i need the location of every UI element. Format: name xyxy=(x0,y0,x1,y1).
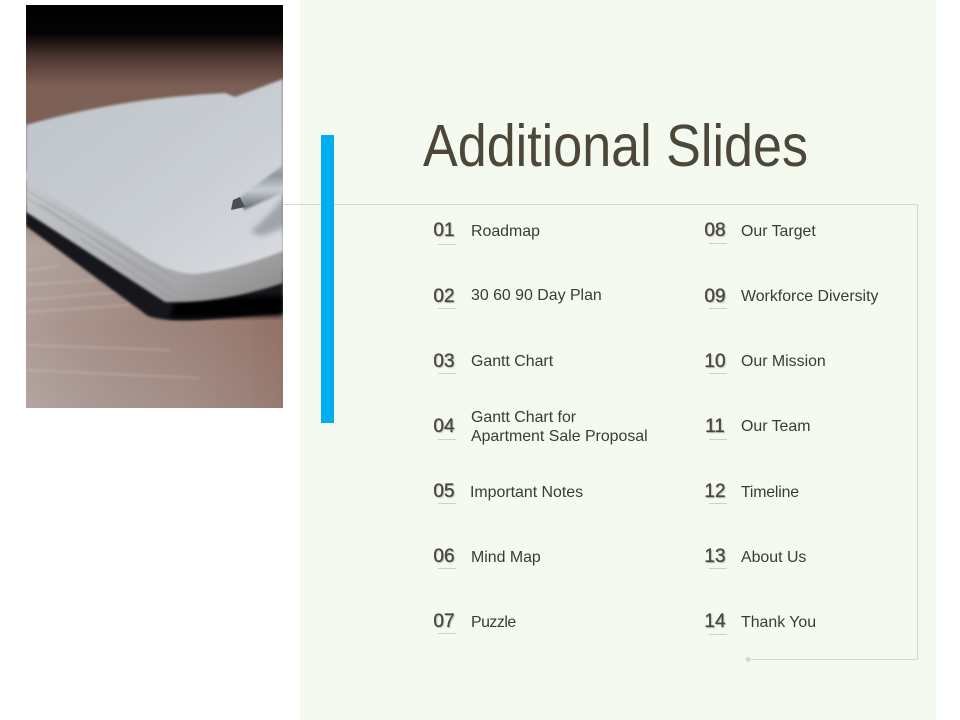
item 09: 09 xyxy=(704,286,726,307)
item 03: Gantt Chart xyxy=(471,353,553,370)
item 10: 10 xyxy=(704,351,726,372)
item 04: Apartment Sale Proposal xyxy=(471,428,648,445)
item 05: Important Notes xyxy=(470,484,583,501)
item 11: Our Team xyxy=(741,418,810,435)
item 02: 02 xyxy=(433,286,455,307)
item 01: Roadmap xyxy=(471,223,540,240)
item 02: 30 60 90 Day Plan xyxy=(471,287,602,304)
list: left column xyxy=(433,220,648,634)
item 12: 12 xyxy=(704,481,726,502)
item 07 xyxy=(433,611,516,634)
item 09: Workforce Diversity xyxy=(741,288,878,305)
item 03: 03 xyxy=(433,351,455,372)
item 04: Gantt Chart for xyxy=(471,409,576,426)
item 11 xyxy=(705,416,810,440)
item 06 xyxy=(433,546,541,569)
item 14: Thank You xyxy=(741,614,816,631)
content frame line xyxy=(283,204,918,662)
item 04: 04 xyxy=(433,416,455,437)
item 03 xyxy=(433,351,554,374)
item 09 xyxy=(704,286,878,309)
item 01 xyxy=(433,220,540,245)
item 12 xyxy=(704,481,799,504)
item 11: 11 xyxy=(705,416,725,437)
item 13: About Us xyxy=(741,549,806,566)
accent bar xyxy=(321,135,334,423)
item 06: 06 xyxy=(433,546,455,567)
item 13: 13 xyxy=(704,546,726,567)
item 12: Timeline xyxy=(741,484,799,501)
item 10: Our Mission xyxy=(741,353,826,370)
item 01: 01 xyxy=(433,220,455,241)
item 02 xyxy=(433,286,602,309)
item 08 xyxy=(704,220,816,244)
item 10 xyxy=(704,351,826,374)
item 05: 05 xyxy=(433,481,455,502)
item 08: Our Target xyxy=(741,223,816,240)
item 14 xyxy=(704,611,816,635)
item 08: 08 xyxy=(704,220,726,241)
panel: pale green background xyxy=(300,0,936,720)
photo: notebook and pen xyxy=(26,5,283,408)
list: right column xyxy=(704,220,878,635)
item 07: Puzzle xyxy=(471,614,516,631)
item 13 xyxy=(704,546,806,569)
item 07: 07 xyxy=(433,611,455,632)
item 05 xyxy=(433,481,583,504)
item 06: Mind Map xyxy=(471,549,541,566)
item 14: 14 xyxy=(704,611,726,632)
item 04 xyxy=(433,409,648,445)
